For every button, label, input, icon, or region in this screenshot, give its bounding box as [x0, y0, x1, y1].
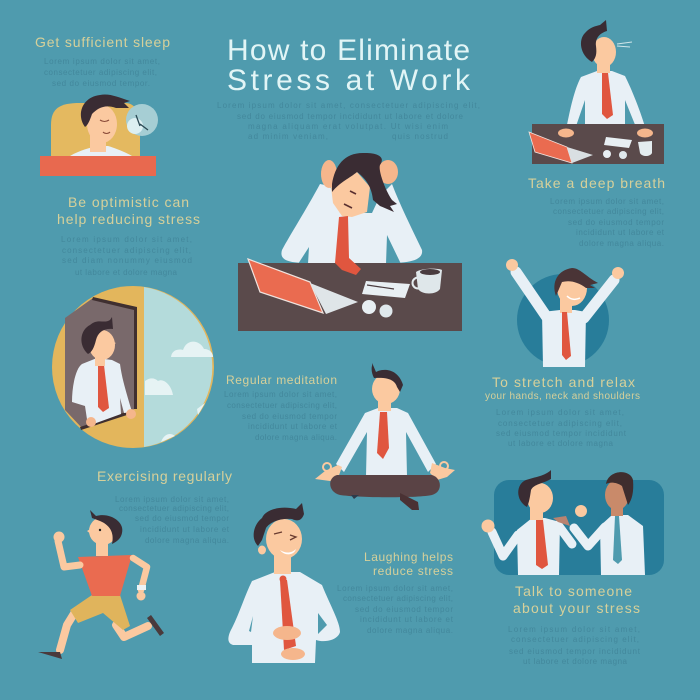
body text: sed eiusmod tempor incididunt: [509, 647, 641, 656]
icon: man opening door to sky: [52, 286, 214, 448]
body text: incididunt ut labore et: [248, 422, 338, 431]
heading: help reducing stress: [57, 211, 200, 227]
body text: Lorem ipsum dolor sit amet,: [115, 495, 229, 504]
heading: Laughing helps: [364, 550, 453, 564]
body text: dolore magna aliqua.: [367, 626, 453, 635]
panel: regular meditation: [224, 363, 455, 510]
heading: Regular meditation: [226, 373, 337, 387]
body text: [44, 57, 160, 88]
body text: consectetuer adipiscing elit,: [343, 594, 453, 603]
body text: dolore magna aliqua.: [145, 536, 229, 545]
heading: [364, 550, 453, 578]
icon: man breathing at desk: [529, 20, 664, 164]
body text: sed do eiusmod tempor: [568, 218, 664, 227]
body text: dolore magna aliqua.: [255, 433, 337, 442]
icon: running man: [38, 510, 164, 659]
laptop: [248, 259, 323, 313]
eye and mouth: [344, 191, 356, 208]
body text: [550, 197, 665, 248]
panel: take a deep breath: [528, 20, 665, 248]
intro text: [217, 101, 480, 141]
body text: Lorem ipsum dolor sit amet,: [44, 57, 160, 66]
body text: consectetuer adipiscing elit,: [511, 635, 639, 644]
intro text: ad minim veniam,: [248, 132, 328, 141]
intro text: magna aliquam erat volutpat. Ut wisi enim: [248, 122, 448, 131]
panel: laughing helps reduce stress: [228, 503, 454, 663]
heading: Be optimistic can: [68, 194, 189, 210]
body text: [115, 495, 230, 545]
heading: To stretch and relax: [492, 374, 635, 390]
panel: be optimistic: [52, 194, 214, 448]
body text: Lorem ipsum dolor sit amet,: [224, 390, 337, 399]
body text: consectetuer adipiscing elit,: [498, 419, 622, 428]
panel: stretch and relax: [485, 259, 640, 448]
heading: [57, 194, 200, 227]
body text: Lorem ipsum dolor sit amet,: [550, 197, 664, 206]
heading: Take a deep breath: [528, 175, 665, 191]
body text: incididunt ut labore et: [576, 228, 665, 237]
heading: Exercising regularly: [97, 468, 232, 484]
desk: [238, 263, 462, 331]
mug: [412, 278, 424, 288]
body text: Lorem ipsum dolor sit amet,: [496, 408, 624, 417]
tie: [335, 216, 361, 275]
body text: [508, 625, 641, 666]
body text: [496, 408, 627, 448]
intro text: sed do eiusmod tempor incididunt ut labore et dolore: [237, 112, 464, 121]
body text: Lorem ipsum dolor sit amet,: [508, 625, 640, 634]
body text: ut labore et dolore magna: [523, 657, 628, 666]
body text: Lorem ipsum dolor sit amet,: [337, 584, 453, 593]
icon: man stretching: [506, 259, 624, 367]
body text: [61, 235, 192, 277]
title: Stress at Work: [227, 64, 471, 97]
body text: sed eiusmod tempor incididunt: [496, 429, 627, 438]
body text: sed diam nonummy eiusmod: [62, 256, 192, 265]
heading: about your stress: [513, 600, 640, 616]
body text: consectetuer adipiscing elit,: [227, 401, 337, 410]
body text: sed do eiusmod tempor: [355, 605, 453, 614]
body text: consectetuer adipiscing elit,: [119, 504, 229, 513]
heading: [513, 583, 640, 616]
body text: incididunt ut labore et: [140, 525, 230, 534]
body text: [224, 390, 338, 442]
icon: laughing man: [228, 503, 340, 663]
neck and face: [331, 172, 370, 217]
body text: ut labore et dolore magna: [75, 268, 178, 277]
title: How to Eliminate: [227, 34, 470, 67]
panel: get sufficient sleep: [35, 34, 170, 176]
body text: sed do eiusmod tempor.: [52, 79, 150, 88]
illustration: stressed man at desk: [238, 153, 462, 331]
body text: [337, 584, 454, 635]
body text: dolore magna aliqua.: [579, 239, 664, 248]
shirt: [281, 184, 422, 263]
heading: your hands, neck and shoulders: [485, 391, 640, 402]
body text: consectetuer adipiscing elit,: [62, 246, 191, 255]
title: [227, 34, 471, 97]
hair: [332, 153, 397, 212]
body text: consectetuer adipiscing elit,: [553, 207, 664, 216]
heading: [485, 374, 640, 402]
body text: consectetuer adipiscing elit,: [44, 68, 157, 77]
paper balls: [362, 300, 376, 314]
body text: ut labore et dolore magna: [508, 439, 614, 448]
icon: two men talking: [482, 470, 664, 575]
body text: sed do eiusmod tempor: [242, 412, 337, 421]
body text: sed do eiusmod tempor: [135, 514, 229, 523]
heading: Talk to someone: [515, 583, 632, 599]
intro text: quis nostrud: [392, 132, 448, 141]
body text: Lorem ipsum dolor sit amet,: [61, 235, 192, 244]
intro text: Lorem ipsum dolor sit amet, consectetuer adipiscing elit,: [217, 101, 480, 110]
icon: meditating man: [315, 363, 455, 510]
paper and pen: [362, 281, 410, 298]
panel: talk to someone: [482, 470, 664, 666]
icon: sleeping man: [40, 95, 158, 176]
hands: [321, 160, 337, 188]
body text: incididunt ut labore et: [360, 615, 454, 624]
heading: Get sufficient sleep: [35, 34, 170, 50]
heading: reduce stress: [373, 564, 453, 578]
panel: exercising regularly: [38, 468, 232, 659]
